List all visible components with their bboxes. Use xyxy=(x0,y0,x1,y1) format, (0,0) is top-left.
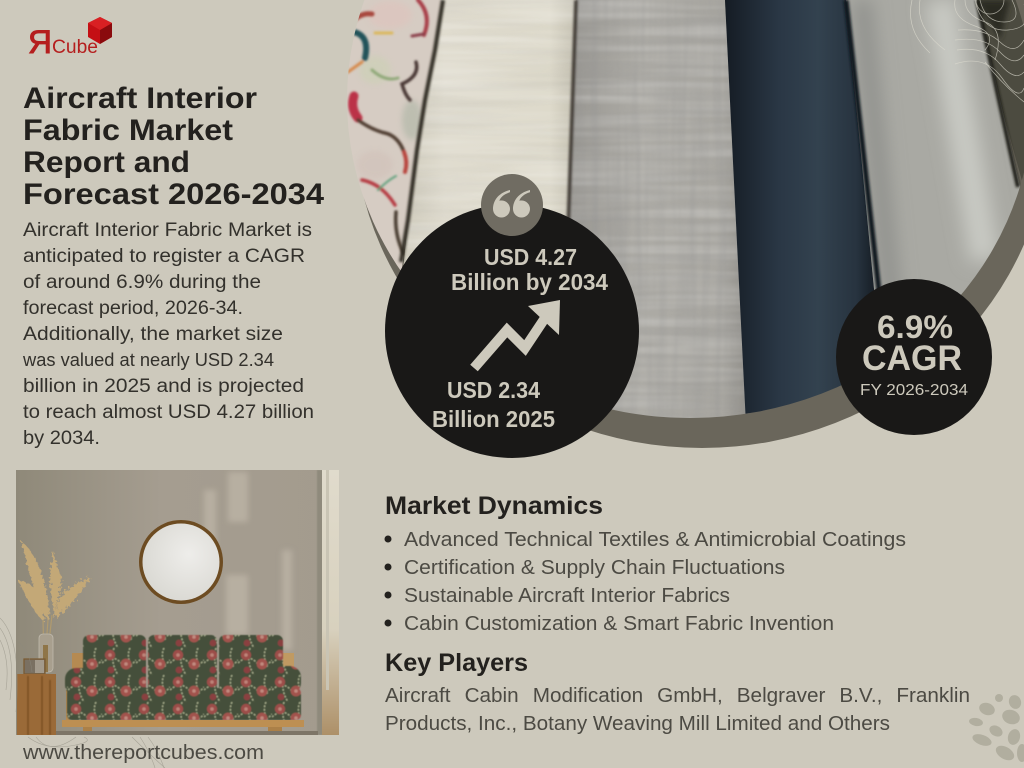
curtain xyxy=(317,470,339,735)
mesh line decoration bottom left xyxy=(0,618,165,768)
CAGR callout circle xyxy=(836,279,992,435)
icon: red cube xyxy=(88,17,112,44)
title: Report and xyxy=(23,146,190,179)
pampas stems xyxy=(42,615,52,634)
summary text block: billion in 2025 and is projected xyxy=(23,376,304,397)
icon: quotation marks badge xyxy=(481,174,543,236)
wall light patches xyxy=(204,472,292,650)
market dynamics bullet list xyxy=(384,529,906,635)
heading: market dynamics: Market Dynamics xyxy=(385,492,603,520)
market dynamics bullet list: Advanced Technical Textiles & Antimicrobial Coatings xyxy=(404,529,906,551)
2034 value: USD 4.27 xyxy=(484,244,577,270)
CAGR callout circle: FY 2026-2034 xyxy=(860,382,968,399)
2034 value: Billion by 2034 xyxy=(451,269,608,295)
summary text block: Additionally, the market size xyxy=(23,324,283,345)
summary text block xyxy=(22,220,314,449)
navy fabric roll xyxy=(725,0,880,425)
vase xyxy=(39,634,53,672)
title: Fabric Market xyxy=(23,114,233,147)
picture frame xyxy=(24,659,45,674)
key players text xyxy=(385,685,970,735)
title: Forecast 2026-2034 xyxy=(23,178,324,211)
grey plaid fabric roll xyxy=(560,0,755,425)
key players text: Aircraft Cabin Modification GmbH, Belgraver B.V., Franklin xyxy=(385,685,970,707)
summary text block: was valued at nearly USD 2.34 xyxy=(22,350,274,370)
market size callout circle xyxy=(385,174,639,458)
summary text block: of around 6.9% during the xyxy=(23,272,261,293)
floor shadow xyxy=(56,731,318,735)
decorative olive ring behind fabric photo xyxy=(354,0,1024,448)
summary text block: Aircraft Interior Fabric Market is xyxy=(23,220,312,241)
2025 value xyxy=(432,377,555,432)
icon: rising arrow xyxy=(474,300,560,368)
logo: R mark: Я xyxy=(28,24,52,60)
2034 value xyxy=(451,244,608,295)
title: Aircraft Interior xyxy=(23,82,257,115)
dark fabric roll xyxy=(977,0,1024,180)
pebble decoration bottom right xyxy=(968,693,1024,763)
photo: rolls of fabric in circular crop xyxy=(340,0,1024,425)
logo xyxy=(28,17,112,60)
market dynamics bullet list: Certification & Supply Chain Fluctuations xyxy=(404,557,785,579)
title xyxy=(23,82,324,211)
pampas grass xyxy=(18,541,91,622)
patterned fabric roll xyxy=(347,0,442,270)
side table xyxy=(17,674,56,735)
sofa xyxy=(62,635,304,735)
CAGR callout circle: CAGR xyxy=(862,339,962,378)
website url: www.thereportcubes.com xyxy=(22,742,264,764)
2025 value: Billion 2025 xyxy=(432,406,555,432)
logo: Cube wordmark: Cube xyxy=(52,37,98,58)
summary text block: forecast period, 2026-34. xyxy=(23,298,243,319)
key players text: Products, Inc., Botany Weaving Mill Limited and Others xyxy=(385,713,890,735)
mirror xyxy=(139,520,223,604)
photo: living room with floral sofa xyxy=(16,470,339,735)
summary text block: to reach almost USD 4.27 billion xyxy=(23,402,314,423)
2025 value: USD 2.34 xyxy=(447,377,540,403)
market dynamics bullet list: Sustainable Aircraft Interior Fabrics xyxy=(404,585,730,607)
heading: key players: Key Players xyxy=(385,649,528,677)
light grey fabric roll xyxy=(842,0,1021,295)
summary text block: anticipated to register a CAGR xyxy=(23,246,305,267)
contour line decoration top right xyxy=(910,0,1024,102)
CAGR callout circle: 6.9% xyxy=(877,309,953,345)
cream fabric roll xyxy=(397,0,576,265)
summary text block: by 2034. xyxy=(23,428,100,449)
market dynamics bullet list: Cabin Customization & Smart Fabric Invention xyxy=(404,613,834,635)
